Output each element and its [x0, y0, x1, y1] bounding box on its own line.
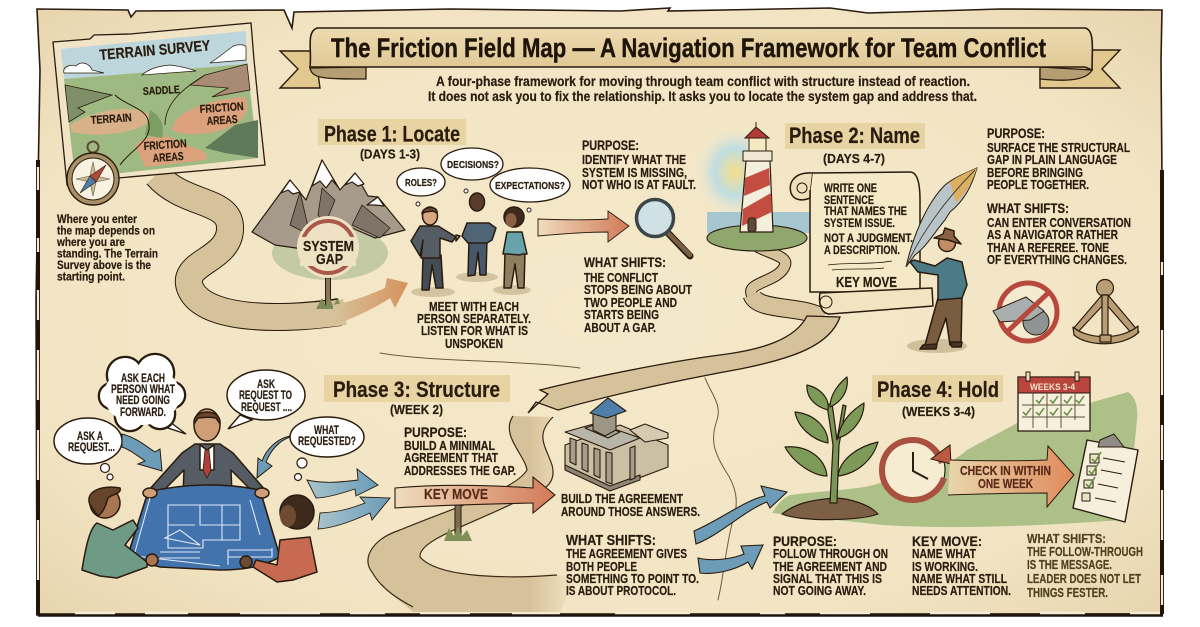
subtitle: It does not ask you to fix the relationship. It asks you to locate the system gap and address that.	[428, 88, 977, 104]
text: phase 2 what shifts: THAN A REFEREE. TONE	[987, 241, 1109, 255]
speech bubble: ask each person	[99, 354, 186, 434]
icon: sextant	[1073, 280, 1139, 344]
text: phase 4 purpose: SIGNAL THAT THIS IS	[773, 572, 882, 586]
speech bubble: ask each person: FORWARD.	[120, 405, 166, 419]
phase 2 heading: Phase 2: Name	[789, 123, 920, 148]
road: Phase 3 winding path	[368, 416, 575, 612]
map clouds	[64, 45, 246, 75]
thought bubble: what requested	[290, 417, 364, 480]
text: map entry note: starting point.	[57, 272, 125, 284]
text: phase 4 purpose: THE AGREEMENT AND	[773, 560, 887, 574]
map labels: SADDLE	[143, 84, 180, 98]
text: phase 2 purpose: PURPOSE:	[987, 126, 1045, 141]
scroll	[790, 172, 933, 314]
text: phase 4 key move	[912, 533, 1011, 598]
text: phase 3 what shifts	[566, 533, 699, 598]
text: meet with each person: PERSON SEPARATELY.	[417, 312, 531, 326]
blueprint	[127, 485, 280, 570]
phase 1 heading: (DAYS 1-3)	[360, 146, 420, 162]
icon: building	[565, 398, 668, 491]
text: phase 3 purpose: PURPOSE:	[404, 424, 467, 440]
text: phase 4 purpose: FOLLOW THROUGH ON	[773, 547, 888, 561]
text: phase 3 what shifts: IS ABOUT PROTOCOL.	[566, 584, 676, 598]
map labels: FRICTION	[143, 138, 187, 153]
text: map entry note	[56, 214, 158, 284]
title: The Friction Field Map — A Navigation Framework for Team Conflict	[331, 33, 1046, 63]
text: phase 1 purpose: NOT WHO IS AT FAULT.	[582, 178, 696, 192]
text: phase 4 purpose: PURPOSE:	[773, 533, 837, 549]
text: phase 4 key move: NEEDS ATTENTION.	[912, 584, 1011, 598]
text: phase 3 what shifts: THE AGREEMENT GIVES	[566, 547, 687, 561]
text: map entry note: where you are	[56, 237, 125, 249]
text: phase 4 key move: KEY MOVE:	[912, 533, 982, 549]
phase 4 heading: (WEEKS 3-4)	[902, 404, 975, 419]
text: phase 3 purpose: ADDRESSES THE GAP.	[404, 464, 516, 478]
road: survey to Phase 1	[157, 175, 345, 317]
text: phase 2 purpose	[987, 126, 1130, 192]
illustration: sapling	[782, 377, 878, 520]
scroll text: A DESCRIPTION.	[824, 243, 900, 257]
text: phase 4 key move: IS WORKING.	[912, 560, 978, 574]
speech bubble: ask each person: ASK EACH	[121, 371, 165, 385]
figure: right listener	[240, 495, 317, 582]
blue arrow upper	[694, 486, 787, 544]
phase 3 heading: Phase 3: Structure	[333, 377, 500, 402]
subtitle: A four-phase framework for moving through team conflict with structure instead of reaction.	[436, 73, 970, 89]
text: phase 4 what shifts: THE FOLLOW-THROUGH	[1027, 545, 1143, 559]
panel: phase 1 locate	[252, 119, 696, 351]
speech bubble: ask each person: NEED GOING	[116, 393, 170, 407]
text: phase 1 what shifts: STARTS BEING	[584, 308, 659, 322]
thought bubble: ask a request: ASK A	[77, 429, 103, 443]
map labels: TERRAIN SURVEY	[99, 37, 211, 64]
thought bubble: roles	[397, 168, 445, 206]
text: phase 2 what shifts: CAN ENTER CONVERSATION	[987, 216, 1131, 230]
text: map entry note: standing. The Terrain	[57, 248, 158, 260]
figure: left listener	[82, 487, 158, 578]
scroll text: SENTENCE	[824, 193, 874, 207]
panel: terrain survey map	[53, 23, 265, 185]
thought bubble: decisions: DECISIONS?	[447, 159, 499, 171]
text: meet with each person: UNSPOKEN	[445, 337, 503, 351]
figure: man with hands on hips	[456, 193, 498, 282]
icon: mountains	[252, 160, 405, 280]
icon: calendar	[1018, 372, 1090, 431]
map paper	[53, 23, 265, 185]
icon: clipboard	[1073, 434, 1138, 522]
text: meet with each person: MEET WITH EACH	[429, 300, 519, 314]
arrow: blue to phase 3 lower	[318, 497, 390, 529]
text: phase 2 what shifts: AS A NAVIGATOR RATHER	[987, 228, 1118, 242]
arrow: check in within one week: ONE WEEK	[978, 477, 1033, 491]
icon: quill	[906, 168, 977, 267]
panel: phase 2 name	[693, 122, 1139, 353]
icon: no whistle	[993, 283, 1057, 341]
text: phase 3 purpose: BUILD A MINIMAL	[404, 439, 495, 453]
panel: phase 3 structure	[54, 354, 700, 598]
map hills and patches	[65, 64, 258, 167]
text: build the agreement	[561, 492, 700, 519]
decorative contour: thin terrain lines	[380, 353, 736, 600]
road arrow: Phase 2 to Phase 3	[528, 316, 840, 413]
arrow: check in within one week: CHECK IN WITHIN	[960, 464, 1051, 478]
phase 2 heading	[785, 123, 925, 166]
text: phase 4 what shifts	[1027, 531, 1143, 600]
text: phase 3 purpose: AGREEMENT THAT	[404, 451, 498, 465]
scroll text: THAT NAMES THE	[824, 204, 907, 218]
thought bubble: what requested: WHAT	[314, 423, 339, 437]
thought bubble: decisions	[441, 148, 503, 193]
text: map entry note: Where you enter	[57, 214, 137, 226]
speech bubble: ask each person: PERSON WHAT	[111, 382, 175, 396]
signpost: key move arrow: KEY MOVE	[424, 486, 488, 503]
text: phase 1 what shifts: STOPS BEING ABOUT	[584, 283, 692, 297]
arrow: red to magnifier	[538, 211, 629, 242]
arrow: check in within one week	[948, 446, 1074, 507]
speech bubble: ask request to request	[227, 370, 305, 429]
phase 2 heading: (DAYS 4-7)	[823, 151, 885, 166]
text: phase 3 purpose	[404, 424, 516, 478]
thought bubble: expectations	[490, 168, 570, 212]
text: map entry note: the map depends on	[57, 226, 155, 238]
signpost: key move arrow	[395, 477, 555, 541]
arrow: road to people	[333, 278, 408, 325]
map labels: TERRAIN	[90, 112, 132, 127]
text: phase 4 what shifts: IS THE MESSAGE.	[1027, 558, 1112, 572]
text: phase 1 what shifts	[584, 254, 692, 335]
icon: clock	[881, 438, 951, 502]
thought bubble: ask a request	[54, 418, 122, 480]
illustration: blueprint meeting	[82, 409, 317, 582]
banner left tail	[280, 51, 320, 88]
icon: magnifying glass	[636, 200, 690, 256]
text: map entry note: Survey above is the	[57, 260, 151, 272]
icon: calendar: WEEKS 3-4	[1030, 382, 1076, 393]
text: phase 4 what shifts: LEADER DOES NOT LET	[1027, 572, 1141, 586]
figure: person in teal	[493, 207, 531, 295]
text: meet with each person: LISTEN FOR WHAT IS	[421, 324, 528, 338]
figure: man speaking	[411, 207, 460, 297]
text: phase 4 key move: NAME WHAT	[912, 547, 976, 561]
phase 3 heading	[324, 375, 510, 417]
subtitle	[428, 73, 977, 104]
blue arrow lower	[698, 545, 763, 573]
banner right tail	[1040, 50, 1120, 88]
sign: system gap: SYSTEM	[303, 239, 354, 255]
text: phase 1 purpose: IDENTIFY WHAT THE	[582, 153, 686, 167]
thought bubble: roles: ROLES?	[405, 177, 437, 189]
text: phase 4 purpose: NOT GOING AWAY.	[773, 584, 866, 598]
map labels: AREAS	[152, 151, 184, 165]
map labels: AREAS	[206, 114, 238, 128]
phase 1 heading	[318, 119, 466, 162]
text: phase 1 purpose: SYSTEM IS MISSING,	[582, 166, 687, 180]
text: phase 3 what shifts: BOTH PEOPLE	[566, 560, 637, 574]
map sky	[61, 31, 247, 79]
panel: phase 4 hold	[694, 372, 1143, 600]
text: phase 2 purpose: PEOPLE TOGETHER.	[987, 178, 1089, 192]
arrow: right bubble to facilitator	[257, 436, 290, 478]
speech bubble: ask request to request: ASK	[257, 377, 275, 391]
text: phase 2 what shifts: OF EVERYTHING CHANGES.	[987, 253, 1127, 267]
phase 4 heading: Phase 4: Hold	[877, 377, 999, 402]
sign: system gap	[297, 216, 359, 309]
map labels: FRICTION	[199, 101, 244, 116]
text: phase 1 what shifts: TWO PEOPLE AND	[584, 296, 677, 310]
scroll text: SYSTEM ISSUE.	[824, 216, 895, 230]
icon: compass	[67, 142, 119, 205]
scroll text: KEY MOVE	[836, 274, 897, 291]
phase 3 heading: (WEEK 2)	[390, 402, 443, 417]
sign: system gap: GAP	[316, 252, 343, 268]
text: phase 4 key move: NAME WHAT STILL	[912, 572, 1007, 586]
hill	[772, 392, 1137, 527]
hands on blueprint	[143, 488, 269, 498]
blueprint lines	[135, 498, 272, 566]
phase 4 heading	[872, 375, 1003, 419]
text: phase 1 purpose: PURPOSE:	[582, 138, 639, 153]
scroll text	[824, 181, 913, 291]
figure: navigator writing	[907, 228, 967, 353]
scroll text: NOT A JUDGMENT.	[824, 231, 913, 245]
arrow: left bubble to facilitator	[122, 434, 162, 471]
text: phase 4 purpose	[773, 533, 888, 598]
text: meet with each person	[417, 300, 531, 351]
scroll text: WRITE ONE	[824, 181, 877, 195]
text: phase 1 what shifts: ABOUT A GAP.	[584, 321, 656, 335]
phase 1 heading: Phase 1: Locate	[324, 122, 460, 146]
text: phase 1 what shifts: WHAT SHIFTS:	[584, 254, 666, 270]
figure: facilitator	[148, 409, 266, 497]
text: phase 2 purpose: SURFACE THE STRUCTURAL	[987, 141, 1130, 155]
text: phase 1 what shifts: THE CONFLICT	[584, 271, 658, 285]
speech bubble: ask request to request: REQUEST TO	[239, 388, 292, 402]
text: phase 2 purpose: BEFORE BRINGING	[987, 166, 1083, 180]
text: build the agreement: AROUND THOSE ANSWERS.	[561, 505, 700, 519]
text: phase 2 what shifts: WHAT SHIFTS:	[987, 200, 1069, 216]
text: phase 3 what shifts: WHAT SHIFTS:	[566, 533, 656, 549]
text: phase 4 what shifts: THINGS FESTER.	[1027, 586, 1108, 600]
text: phase 1 purpose	[582, 138, 696, 192]
thought bubble: expectations: EXPECTATIONS?	[495, 180, 565, 192]
map labels	[90, 37, 244, 165]
thought bubble: what requested: REQUESTED?	[298, 434, 356, 448]
arrow: blue to phase 3 upper	[307, 469, 378, 498]
text: build the agreement: BUILD THE AGREEMENT	[561, 492, 683, 506]
speech bubble: ask request to request: REQUEST ....	[241, 400, 292, 414]
text: phase 3 what shifts: SOMETHING TO POINT TO.	[566, 572, 699, 586]
map land	[64, 64, 258, 178]
thought bubble: ask a request: REQUEST...	[68, 440, 115, 454]
banner body	[310, 28, 1092, 70]
text: phase 2 what shifts	[987, 200, 1131, 267]
text: phase 4 what shifts: WHAT SHIFTS:	[1027, 531, 1106, 546]
illustration: lighthouse	[693, 122, 812, 251]
text: phase 2 purpose: GAP IN PLAIN LANGUAGE	[987, 153, 1117, 167]
title banner	[280, 28, 1120, 88]
road: lighthouse to Phase 2 scroll	[751, 235, 822, 318]
